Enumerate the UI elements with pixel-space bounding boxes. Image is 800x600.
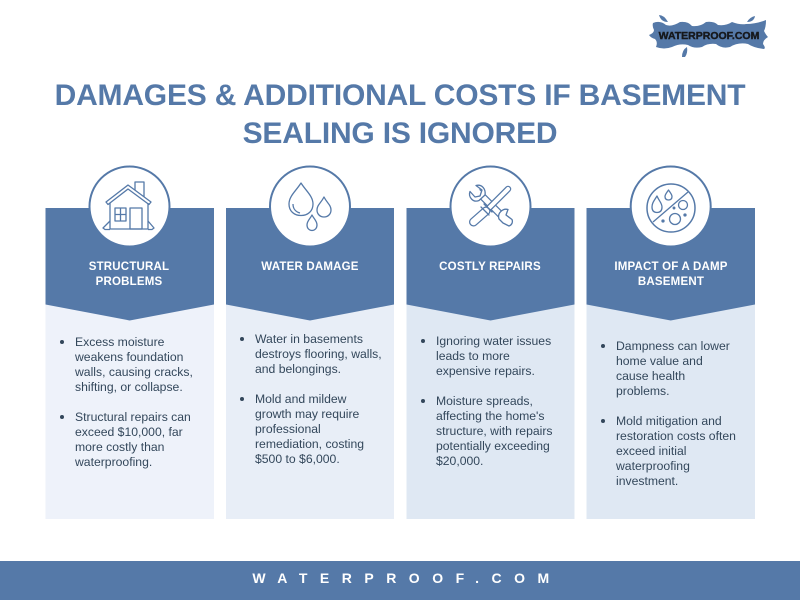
footer: WATERPROOF.COM bbox=[252, 570, 562, 586]
text: water damage bullets: Mold and mildew bbox=[255, 392, 346, 406]
title: SEALING IS IGNORED bbox=[243, 117, 557, 150]
icon: house bbox=[102, 181, 155, 230]
text: structural problems bullets: Excess moisture bbox=[75, 335, 164, 349]
heading: impact of a damp basement bbox=[614, 261, 728, 288]
text: water damage bullets: and belongings. bbox=[255, 362, 341, 376]
text: structural problems bullets: shifting, or collapse. bbox=[75, 380, 183, 394]
heading: costly repairs: COSTLY REPAIRS bbox=[439, 261, 541, 273]
heading: impact of a damp basement: IMPACT OF A DAMP bbox=[614, 261, 728, 273]
panel: impact of a damp basement bbox=[586, 166, 755, 519]
text: water damage bullets: destroys flooring, walls, bbox=[255, 347, 382, 361]
text: water damage bullets: $500 to $6,000. bbox=[255, 452, 340, 466]
text: structural problems bullets: waterproofing. bbox=[75, 455, 152, 469]
text: impact bullets: restoration costs often bbox=[616, 429, 736, 443]
text: impact bullets bbox=[601, 339, 736, 488]
heading: impact of a damp basement: BASEMENT bbox=[638, 276, 704, 288]
icon: wrench and screwdriver bbox=[468, 184, 514, 227]
text: structural problems bullets: exceed $10,000, far bbox=[75, 425, 183, 439]
text: costly repairs bullets: $20,000. bbox=[436, 454, 483, 468]
text: impact bullets: Dampness can lower bbox=[616, 339, 730, 353]
text: costly repairs bullets: Moisture spreads, bbox=[436, 394, 533, 408]
text: costly repairs bullets: expensive repairs. bbox=[436, 364, 535, 378]
text: structural problems bullets: walls, causing cracks, bbox=[75, 365, 193, 379]
text: impact bullets: waterproofing bbox=[616, 459, 690, 473]
panel: structural problems bbox=[46, 166, 214, 519]
text: costly repairs bullets: leads to more bbox=[436, 349, 510, 363]
text: impact bullets: investment. bbox=[616, 474, 678, 488]
text: impact bullets: cause health bbox=[616, 369, 685, 383]
text: costly repairs bullets: Ignoring water issues bbox=[436, 334, 551, 348]
heading: water damage: WATER DAMAGE bbox=[261, 261, 359, 273]
logo: waterproof.com splash: WATERPROOF.COM bbox=[659, 30, 760, 42]
text: costly repairs bullets: potentially exceeding bbox=[436, 439, 550, 453]
footer bbox=[0, 561, 800, 600]
text: water damage bullets: Water in basements bbox=[255, 332, 363, 346]
text: costly repairs bullets: structure, with repairs bbox=[436, 424, 552, 438]
icon: water drops bbox=[288, 182, 332, 232]
panel: water damage bbox=[226, 166, 394, 519]
title: DAMAGES & ADDITIONAL COSTS IF BASEMENT bbox=[55, 79, 745, 112]
icon: damp and mold prohibited bbox=[646, 183, 696, 233]
heading: structural problems bbox=[89, 261, 169, 288]
text: water damage bullets: professional bbox=[255, 422, 321, 436]
text: structural problems bullets: weakens foundation bbox=[75, 350, 183, 364]
text: impact bullets: Mold mitigation and bbox=[616, 414, 722, 428]
text: impact bullets: home value and bbox=[616, 354, 703, 368]
text: costly repairs bullets bbox=[421, 334, 552, 468]
text: water damage bullets bbox=[240, 332, 382, 466]
heading: structural problems: STRUCTURAL bbox=[89, 261, 169, 273]
panel: costly repairs bbox=[406, 166, 574, 519]
text: impact bullets: problems. bbox=[616, 384, 670, 398]
text: impact bullets: exceed initial bbox=[616, 444, 686, 458]
text: water damage bullets: remediation, costing bbox=[255, 437, 364, 451]
logo: waterproof.com splash bbox=[649, 15, 768, 57]
text: structural problems bullets: more costly than bbox=[75, 440, 164, 454]
text: structural problems bullets: Structural repairs can bbox=[75, 410, 191, 424]
title bbox=[55, 79, 746, 150]
heading: structural problems: PROBLEMS bbox=[96, 276, 162, 288]
text: costly repairs bullets: affecting the home's bbox=[436, 409, 544, 423]
text: structural problems bullets bbox=[60, 335, 193, 469]
text: water damage bullets: growth may require bbox=[255, 407, 359, 421]
